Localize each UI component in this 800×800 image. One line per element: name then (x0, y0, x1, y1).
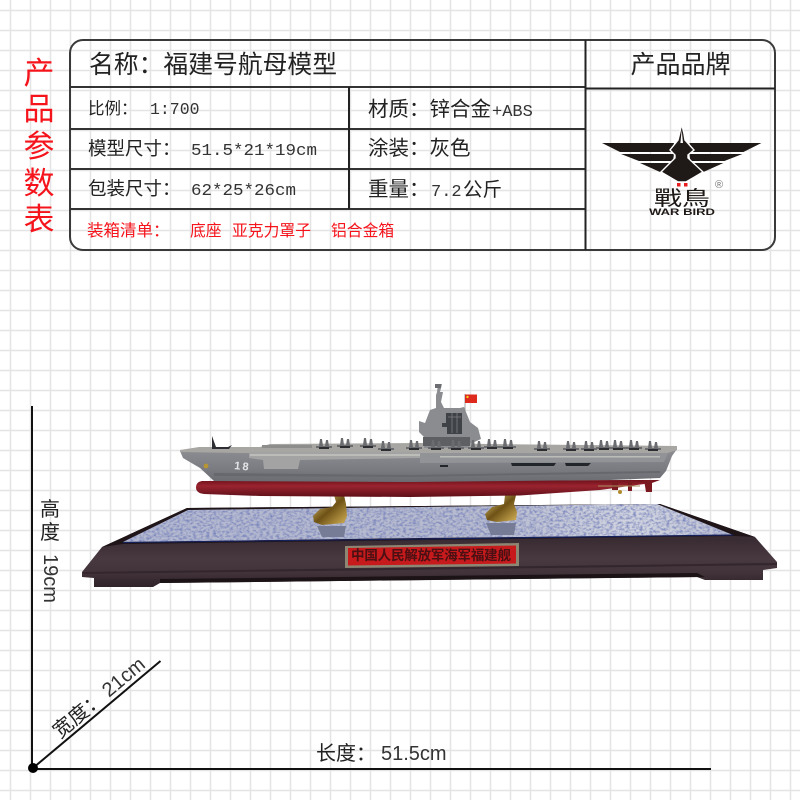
heading: 产品参数表: 参 (24, 121, 54, 166)
ship keel (196, 480, 660, 497)
scale: 比例： (88, 95, 138, 119)
package size: 62*25*26cm (191, 182, 296, 201)
width label: 宽度：21cm (45, 649, 150, 744)
weight: 7.2 (431, 183, 462, 202)
diagram: carrier model on display base (82, 384, 777, 587)
heading: 产品参数表: 产 (24, 48, 54, 93)
heading: 产品参数表: 品 (24, 84, 54, 129)
brand heading: 产品品牌 (630, 45, 731, 81)
packing list: 底座 (190, 218, 222, 241)
length label: 长度： (316, 737, 376, 766)
panel: parameter table (70, 40, 775, 250)
heading: 产品参数表: 数 (24, 158, 54, 203)
island superstructure (419, 384, 481, 448)
plaque: 中国人民解放军海军福建舰 (351, 544, 512, 564)
scale: 1:700 (150, 100, 200, 119)
porcelain panel (123, 504, 733, 542)
material: +ABS (492, 103, 533, 122)
packing list: 装箱清单： (87, 217, 170, 241)
packing list: 铝合金箱 (331, 218, 394, 241)
height label: 度 (40, 516, 60, 545)
hull number 18: 18 (234, 460, 251, 474)
gold stands (313, 495, 517, 537)
height label (39, 493, 61, 603)
axis origin (28, 763, 38, 773)
heading: 产品参数表: 表 (24, 194, 54, 239)
Chinese flag (465, 394, 477, 412)
model size: 模型尺寸： (88, 135, 181, 161)
packing list: 亚克力罩子 (232, 218, 311, 241)
height label: 高 (40, 493, 60, 522)
weight: 重量： (368, 172, 430, 202)
paint: 涂装：灰色 (368, 131, 470, 161)
dimension axes (28, 406, 711, 773)
icon: War Bird logo: WAR BIRD (649, 208, 715, 217)
heading: 产品参数表 (24, 48, 54, 239)
package size: 包装尺寸： (88, 175, 181, 201)
ship hull (180, 449, 677, 482)
product name: 名称：福建号航母模型 (89, 45, 337, 81)
icon: War Bird logo: ® (715, 179, 723, 191)
rudders and propellers (598, 480, 652, 494)
logo wordmark: 戰鳥 (654, 183, 710, 212)
bow emblem (204, 464, 208, 468)
height label: 19cm (39, 554, 61, 603)
weight: 公斤 (463, 173, 502, 202)
hull windows (440, 463, 591, 467)
material: 材质：锌合金 (368, 92, 491, 122)
model size: 51.5*21*19cm (191, 142, 317, 161)
deck aircraft (212, 436, 661, 451)
deck edge (180, 443, 677, 455)
sponsons (249, 452, 668, 469)
icon: War Bird logo (602, 124, 761, 217)
display base (82, 504, 777, 587)
length label: 51.5cm (381, 743, 447, 765)
